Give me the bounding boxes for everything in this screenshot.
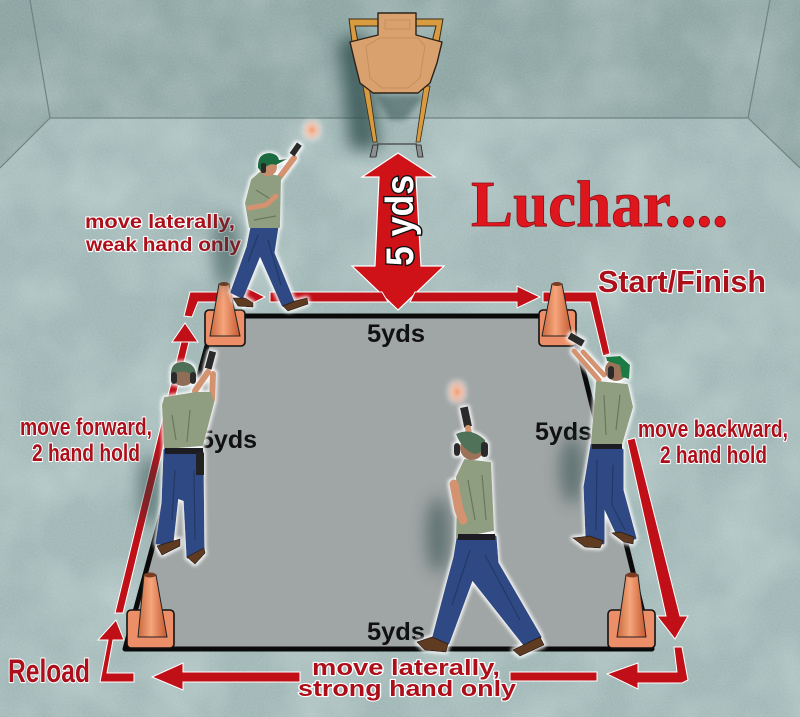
course arrows	[98, 286, 688, 690]
shooter: right, moving backward	[568, 333, 635, 548]
label: weak hand: weak hand only	[85, 235, 241, 256]
figure shadows	[138, 212, 584, 573]
label: weak hand: move laterally,	[85, 212, 235, 233]
arrow: move laterally strong hand	[152, 663, 300, 690]
arrow: top segment centre	[270, 292, 388, 302]
shooter: top, weak hand only	[232, 118, 323, 311]
distance labels	[200, 320, 592, 646]
cone: bottom left	[127, 572, 174, 648]
label: strong hand: move laterally,	[312, 655, 500, 680]
cone: top left	[205, 282, 245, 346]
heading: Luchar: Luchar....	[471, 168, 728, 241]
arrow: bottom right corner	[607, 647, 688, 689]
label: strong hand: strong hand only	[298, 676, 517, 701]
label: move forward: 2 hand hold	[32, 440, 140, 467]
arrow: forward pointing head	[172, 323, 198, 342]
shooter: centre, strong hand only	[417, 378, 544, 656]
arrow: move backward	[627, 438, 688, 639]
arrow: top segment to start cone	[410, 286, 540, 308]
label: move backward	[638, 416, 788, 469]
distance labels: 5yds	[367, 320, 425, 348]
arrow: move forward	[115, 342, 189, 613]
label: move backward: 2 hand hold	[660, 442, 767, 469]
shooter: left, moving forward	[157, 351, 216, 564]
arrow: reload corner	[98, 620, 134, 682]
distance labels: 5yds	[367, 618, 425, 646]
target on stand	[338, 13, 443, 157]
arrow: top left corner	[184, 286, 265, 317]
cones	[127, 282, 655, 648]
label: weak hand	[85, 212, 241, 256]
five yard label: 5 yds	[379, 175, 422, 266]
label: move forward: move forward,	[20, 414, 152, 441]
cone: top right	[539, 282, 576, 346]
label: start finish: Start/Finish	[598, 264, 766, 299]
label: reload: Reload	[8, 653, 90, 689]
label: move forward	[20, 414, 152, 467]
cone: bottom right	[608, 572, 655, 648]
distance labels: 5yds	[200, 426, 257, 454]
five yard double arrow	[352, 153, 444, 310]
distance labels: 5yds	[535, 418, 592, 446]
arrow: bottom mid segment	[510, 672, 597, 681]
label: strong hand	[298, 655, 517, 701]
gray floor square	[125, 316, 655, 650]
arrow: top right corner	[543, 292, 610, 356]
